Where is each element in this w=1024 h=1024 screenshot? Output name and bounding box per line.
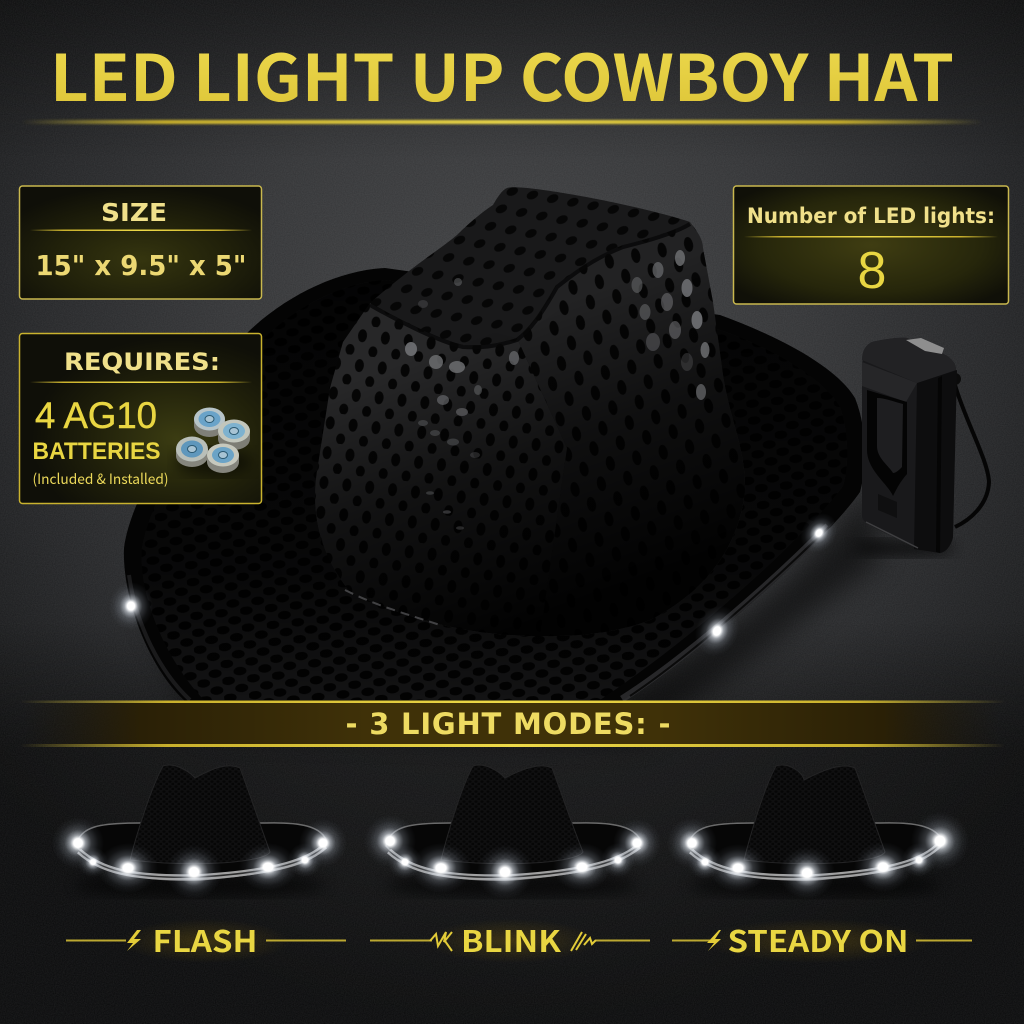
brim edge highlight bbox=[622, 526, 828, 699]
icon: left zigzag bbox=[430, 932, 452, 951]
panel: requires bbox=[20, 334, 262, 504]
main hat photo bbox=[109, 187, 880, 740]
mode label: steady on bbox=[672, 917, 972, 963]
LED count value: 8 bbox=[858, 242, 886, 300]
battery pack bbox=[855, 338, 989, 557]
hat brim bbox=[124, 268, 865, 702]
crown crease bbox=[370, 224, 690, 347]
hat band bbox=[345, 590, 440, 625]
crown left panel bbox=[315, 303, 567, 636]
crown sequin highlights bbox=[405, 250, 710, 530]
mode hat: flash bbox=[52, 765, 347, 899]
crown top panel bbox=[370, 187, 690, 345]
banner heading: - 3 LIGHT MODES: - bbox=[346, 707, 670, 741]
panel: number of LED lights bbox=[734, 186, 1008, 304]
mode label: flash: FLASH bbox=[152, 917, 258, 961]
mode label: flash bbox=[66, 917, 346, 963]
LED count heading: Number of LED lights: bbox=[747, 204, 995, 228]
batteries label: BATTERIES bbox=[32, 438, 160, 465]
panel: size bbox=[20, 186, 262, 299]
battery count: 4 AG10 bbox=[35, 395, 157, 436]
icon: lightning bolt bbox=[127, 930, 141, 951]
icon: batteries bbox=[175, 408, 251, 476]
title: LED LIGHT UP COWBOY HAT bbox=[50, 28, 954, 120]
brim LEDs bbox=[109, 506, 845, 663]
mode label: steady on: STEADY ON bbox=[728, 917, 908, 961]
requires heading: REQUIRES: bbox=[64, 348, 220, 376]
size value: 15" x 9.5" x 5" bbox=[36, 249, 246, 282]
crown right panel bbox=[517, 222, 745, 636]
mode hat: blink bbox=[364, 765, 661, 899]
crown shading bbox=[315, 222, 745, 636]
included note: (Included & Installed) bbox=[32, 469, 168, 489]
mode label: blink: BLINK bbox=[461, 917, 561, 961]
mode label: blink bbox=[370, 917, 650, 963]
mode hat: steady on bbox=[667, 765, 969, 899]
size heading: SIZE bbox=[101, 198, 167, 227]
icon: right zigzag bbox=[571, 932, 596, 951]
pack clip bbox=[862, 362, 917, 402]
hat crown bbox=[315, 187, 745, 636]
modes banner bbox=[20, 700, 1005, 747]
hat shadow bbox=[130, 480, 880, 740]
pack cord bbox=[955, 385, 989, 527]
icon: lightning bolt bbox=[707, 930, 721, 951]
pack body bbox=[862, 338, 956, 553]
